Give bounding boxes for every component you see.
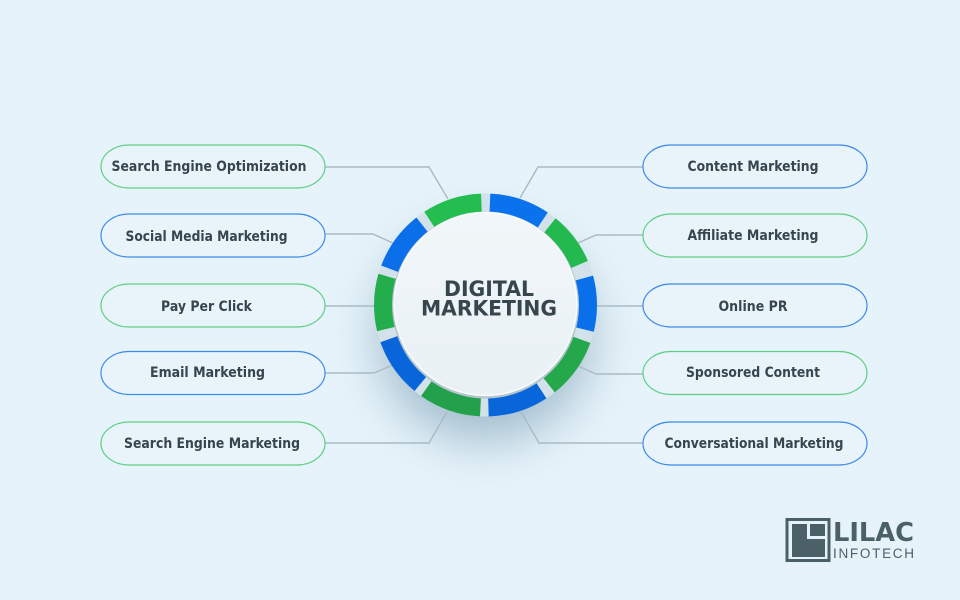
pill: Online PR <box>643 284 867 327</box>
pill: Search Engine Optimization: Search Engine Optimization <box>112 159 306 175</box>
connector lines <box>325 167 643 443</box>
logo mark <box>787 520 829 560</box>
pill: Content Marketing: Content Marketing <box>688 159 818 175</box>
logo: Lilac Infotech: INFOTECH <box>833 546 914 561</box>
pill: Content Marketing <box>643 145 867 188</box>
pill: Sponsored Content: Sponsored Content <box>686 365 820 381</box>
drop shadow under hub <box>380 230 590 440</box>
pill: Social Media Marketing: Social Media Marketing <box>126 229 288 245</box>
pill: Conversational Marketing: Conversational Marketing <box>664 436 844 452</box>
pill: Affiliate Marketing: Affiliate Marketing <box>688 228 818 244</box>
pill: Online PR: Online PR <box>718 299 788 315</box>
ring track <box>383 203 588 407</box>
pill: Social Media Marketing <box>101 214 325 257</box>
pill: Search Engine Marketing: Search Engine Marketing <box>124 436 300 452</box>
pill: Search Engine Optimization <box>101 145 325 188</box>
logo wordmark: LILAC <box>833 518 914 548</box>
central hub <box>392 212 579 398</box>
pill: Search Engine Marketing <box>101 422 325 465</box>
hub title: MARKETING <box>421 296 557 320</box>
logo: Lilac Infotech <box>787 518 914 561</box>
pill: Sponsored Content <box>643 352 867 394</box>
pill: Pay Per Click <box>101 284 325 327</box>
pill: Pay Per Click: Pay Per Click <box>161 299 252 315</box>
pill: Email Marketing: Email Marketing <box>150 365 265 381</box>
pill: Affiliate Marketing <box>643 214 867 257</box>
pill: Email Marketing <box>101 352 325 394</box>
segmented ring <box>383 203 588 407</box>
hub title: DIGITAL <box>444 277 534 301</box>
pill: Conversational Marketing <box>643 422 867 465</box>
